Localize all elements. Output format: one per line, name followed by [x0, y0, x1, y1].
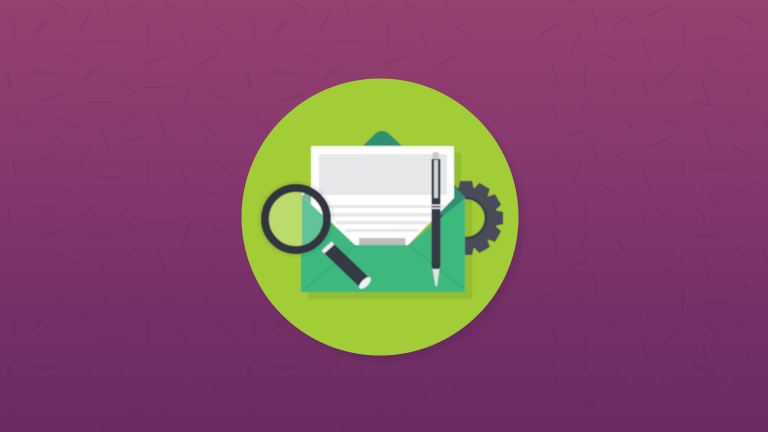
magnifier handle [328, 248, 363, 281]
letter text lines [320, 205, 444, 232]
envelope fold lines [306, 246, 463, 288]
letter grey block [319, 154, 447, 195]
magnifier ring [259, 182, 333, 256]
letter footer bar [359, 238, 406, 245]
letter paper [311, 146, 454, 245]
icon: gear [441, 181, 503, 255]
icon: pen [431, 152, 441, 286]
magnifier lens [268, 191, 324, 247]
icon group [259, 131, 503, 299]
circle shadow [248, 85, 524, 361]
green circle [242, 78, 518, 356]
envelope inner back [301, 186, 465, 215]
envelope front [301, 195, 465, 292]
icon: magnifying glass [259, 182, 373, 291]
envelope back flap [363, 131, 402, 146]
envelope shadow [308, 153, 472, 299]
